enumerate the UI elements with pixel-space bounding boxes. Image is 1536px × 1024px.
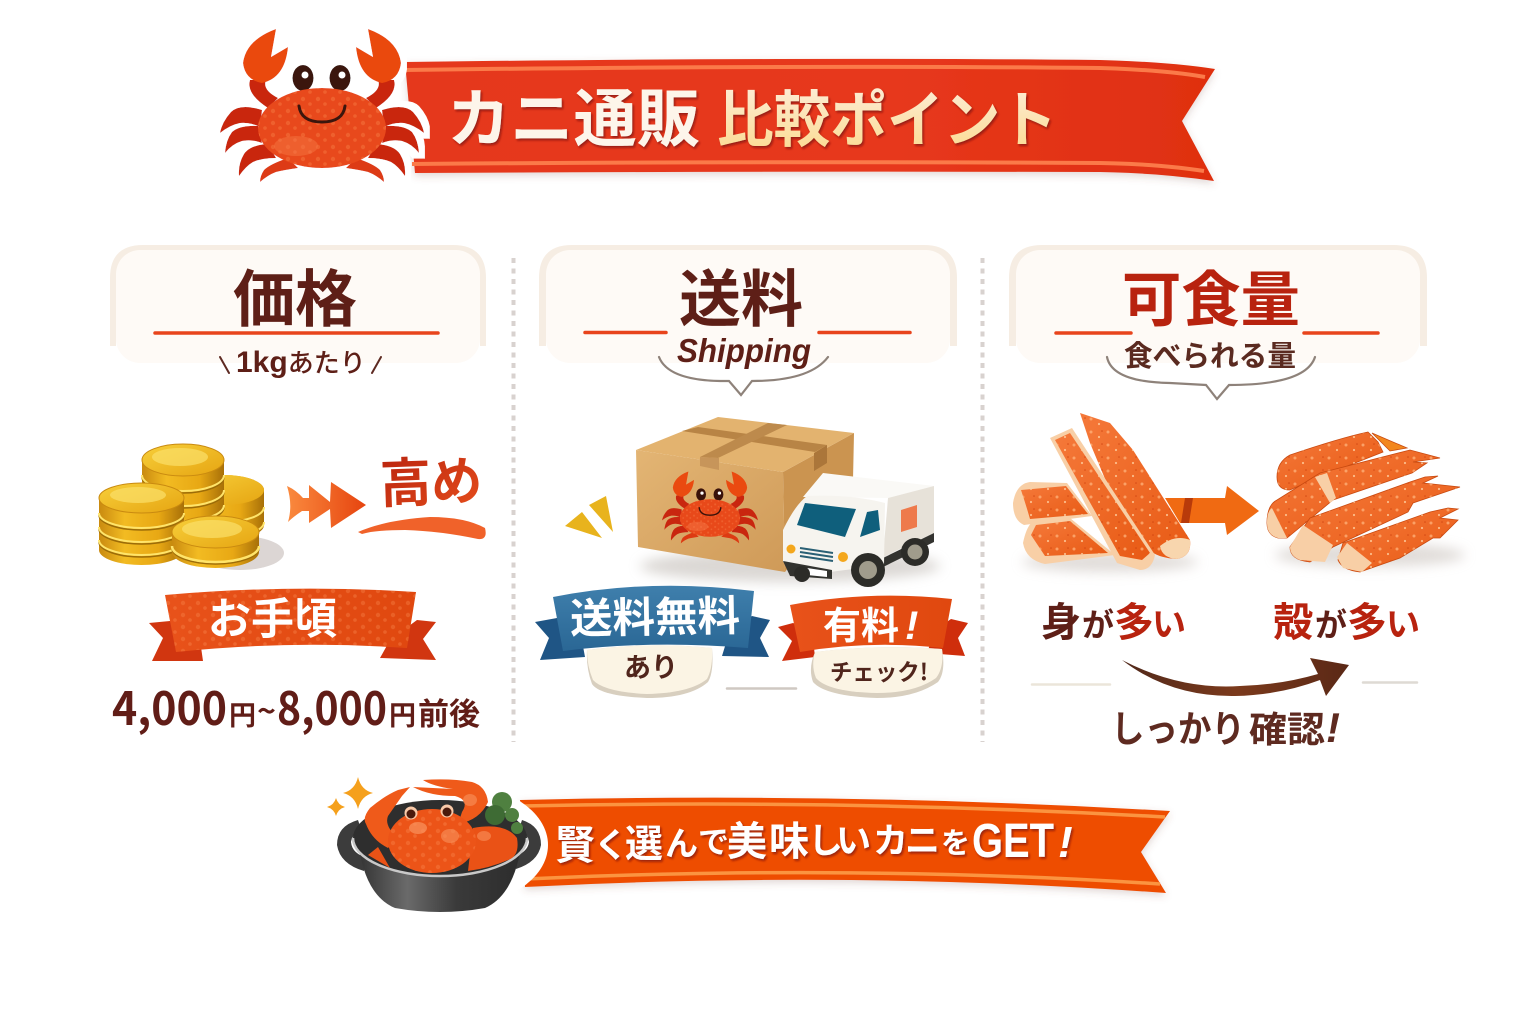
price range: 円 bbox=[389, 694, 416, 733]
icon: coin stacks bbox=[99, 444, 284, 570]
icon: delivery truck bbox=[783, 473, 934, 587]
label: check carefully bbox=[1111, 699, 1340, 753]
call to action: 美 bbox=[727, 809, 767, 867]
shipping header card bbox=[539, 245, 957, 363]
dotted divider right bbox=[980, 258, 984, 742]
price range: 円 bbox=[229, 694, 256, 733]
pot interior bbox=[353, 800, 527, 876]
shipping heading: 送料 bbox=[679, 249, 803, 339]
call to action: い bbox=[836, 813, 871, 864]
price range: ~ bbox=[257, 687, 276, 731]
panel: price bbox=[99, 245, 486, 739]
icon: yellow burst bbox=[565, 496, 613, 538]
call to action: 賢 bbox=[555, 813, 595, 871]
call to action: ニ bbox=[905, 813, 940, 864]
call to action: で bbox=[698, 817, 729, 862]
small rule right bbox=[1363, 681, 1417, 684]
ribbon: free shipping bbox=[535, 583, 770, 660]
speech bracket bbox=[1107, 357, 1315, 399]
label: more shell: 多 bbox=[1347, 590, 1387, 648]
price header card bbox=[110, 245, 486, 363]
icon: crab leg stroke bbox=[358, 517, 486, 539]
icon: shell-heavy crab legs bbox=[1267, 432, 1465, 572]
icon: meaty crab legs bbox=[1013, 413, 1198, 572]
icon: box shadow bbox=[640, 550, 940, 582]
price range: 前後 bbox=[418, 689, 480, 734]
icon: title crab bbox=[220, 29, 424, 182]
greens bbox=[485, 792, 523, 834]
label: more meat: が bbox=[1082, 600, 1114, 646]
call to action: 味 bbox=[769, 809, 809, 867]
pill: available: あり bbox=[624, 646, 678, 685]
price underline bbox=[155, 331, 438, 335]
icon: box crab bbox=[662, 471, 758, 543]
ribbon shape bbox=[520, 798, 1170, 893]
call to action: を bbox=[941, 820, 970, 862]
call to action: 選 bbox=[625, 813, 663, 868]
label: more meat: い bbox=[1152, 597, 1186, 646]
icon: crab in pot bbox=[337, 779, 548, 912]
ribbon: affordable bbox=[149, 585, 436, 661]
label: more shell: 殻 bbox=[1273, 590, 1313, 648]
ribbon shape bbox=[405, 59, 1215, 181]
panel: edible portion bbox=[1009, 245, 1465, 753]
title banner bbox=[405, 59, 1215, 181]
label: more shell: が bbox=[1315, 600, 1347, 646]
edible subtitle: 食べられる量 bbox=[1124, 333, 1296, 375]
ribbon: paid bbox=[778, 595, 968, 661]
arrow: curved bbox=[1122, 658, 1349, 696]
pill: check bbox=[811, 647, 943, 698]
small rule left bbox=[1032, 683, 1110, 686]
shipping underline segments bbox=[585, 331, 910, 334]
ribbon: affordable: お手頃 bbox=[208, 585, 337, 647]
panel: shipping bbox=[535, 245, 968, 698]
call to action: カ bbox=[873, 813, 908, 864]
price heading: 価格 bbox=[233, 249, 357, 339]
pill: check: チェック! bbox=[830, 653, 928, 687]
title text: 比較ポイント bbox=[717, 70, 1057, 159]
label: expensive: 高め bbox=[379, 439, 483, 519]
label: more shell: い bbox=[1386, 597, 1420, 646]
label: check carefully: 確認 bbox=[1249, 701, 1325, 753]
edible header card bbox=[1009, 245, 1427, 363]
pot rim highlight bbox=[353, 838, 527, 876]
call to action: ん bbox=[665, 817, 698, 865]
dotted divider left bbox=[512, 258, 516, 742]
pot handles bbox=[337, 820, 541, 871]
title text bbox=[447, 69, 1057, 160]
arrow: triple chevron bbox=[287, 482, 366, 528]
ribbon: paid: 有料! bbox=[823, 595, 918, 650]
call to action: し bbox=[808, 813, 843, 864]
call to action: ! bbox=[1058, 818, 1073, 867]
arrow: to shell-heavy bbox=[1165, 486, 1259, 535]
price range: 4,000 bbox=[112, 673, 227, 739]
price range bbox=[112, 673, 480, 739]
call to action: く bbox=[594, 818, 628, 867]
label: more meat: 身 bbox=[1041, 590, 1081, 648]
edible heading: 可食量 bbox=[1122, 252, 1300, 339]
label: check carefully: しっかり bbox=[1111, 699, 1245, 753]
speech bracket bbox=[659, 357, 828, 395]
unit label: 1kgあたり bbox=[236, 343, 366, 380]
pot body bbox=[358, 840, 522, 912]
call to action: GET bbox=[972, 815, 1054, 868]
small rule bbox=[727, 687, 796, 690]
label: more meat: 多 bbox=[1114, 590, 1154, 648]
price range: 8,000 bbox=[277, 673, 387, 739]
pill: available bbox=[587, 645, 712, 698]
edible underline segments bbox=[1056, 331, 1378, 335]
icon: sparkles bbox=[327, 777, 373, 816]
bottom banner bbox=[520, 798, 1170, 893]
crab in pot body and claws bbox=[365, 779, 518, 873]
ribbon: free shipping: 送料無料 bbox=[569, 583, 740, 646]
title text: カニ通販 bbox=[447, 69, 700, 160]
icon: cardboard box bbox=[636, 417, 854, 572]
shipping subtitle: Shipping bbox=[677, 332, 811, 369]
label: check carefully: ! bbox=[1326, 704, 1340, 751]
